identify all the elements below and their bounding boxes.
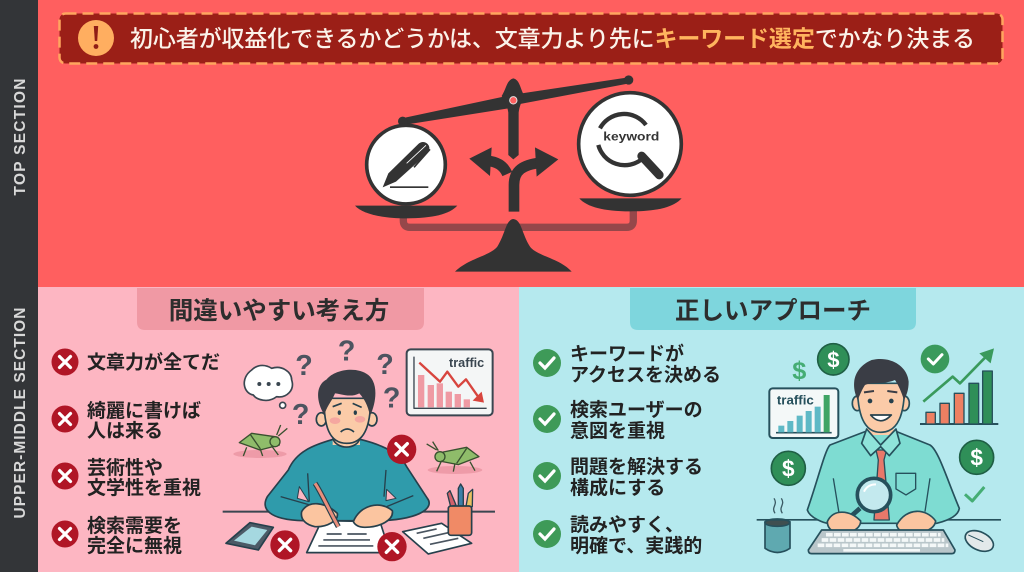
balance scale illustration (355, 75, 682, 272)
keyboard (808, 530, 955, 554)
left pan (355, 206, 457, 218)
traffic down chart: traffic (449, 356, 484, 370)
tie (874, 450, 889, 520)
tablet (226, 523, 273, 550)
panel: top section background (38, 0, 1024, 287)
heading: mistaken thinking (137, 288, 424, 330)
question marks: ? (292, 399, 309, 431)
panel: sidebar (0, 0, 38, 572)
list item: search intent: 意図を重視 (570, 420, 665, 442)
question marks: ? (295, 350, 313, 382)
sidebar label: upper-middle section: UPPER-MIDDLE SECTION (12, 308, 29, 518)
hands (827, 512, 861, 534)
list item: artistry: 芸術性や (87, 456, 163, 479)
list item: writing is everything: 文章力が全てだ (87, 350, 220, 374)
question marks: ? (338, 336, 355, 368)
heading: correct approach (630, 288, 916, 330)
list item: readability (533, 514, 702, 557)
list item: keywords: アクセスを決める (570, 364, 721, 386)
beam (403, 77, 629, 125)
dollar icons: $ (792, 357, 806, 385)
panel: mistaken thinking (38, 287, 519, 572)
list item: problem solving: 構成にする (570, 476, 665, 499)
check icons (921, 345, 984, 501)
x badge on shoulder (387, 435, 416, 464)
list item: search intent (533, 399, 703, 442)
growth chart (920, 348, 998, 424)
pen cup (447, 484, 473, 535)
list item: readability: 読みやすく、 (570, 514, 684, 536)
table line (223, 511, 495, 513)
list item: artistry (52, 456, 201, 499)
dollar icons: $ (827, 347, 839, 372)
thought bubble (244, 365, 292, 408)
list item: ignoring demand: 検索需要を (87, 515, 182, 537)
traffic up chart: traffic (777, 392, 814, 407)
mouse (962, 526, 997, 555)
paper (307, 521, 390, 553)
list item: keywords (533, 342, 721, 386)
fork arrows (469, 147, 558, 212)
panel: correct approach (519, 287, 1024, 572)
list item: keywords: キーワードが (570, 342, 684, 365)
body (807, 432, 959, 523)
side note (403, 523, 472, 554)
question marks: ? (376, 349, 394, 381)
head (852, 359, 909, 456)
list item: problem solving: 問題を解決する (570, 456, 703, 478)
crossbar behind base (403, 211, 633, 227)
title banner (60, 14, 1002, 64)
coffee mug (765, 498, 790, 552)
list item: pretty writing (52, 399, 201, 442)
table line (757, 519, 1001, 521)
icon: keyword magnifier in circle (579, 93, 681, 195)
traffic down chart (407, 349, 493, 415)
body (265, 439, 429, 521)
hands and pencil (301, 483, 392, 527)
list item: writing is everything (52, 348, 220, 376)
pocket (896, 473, 916, 495)
title text: 初心者が収益化できるかどうかは、文章力より先にキーワード選定でかなり決まる (130, 26, 975, 52)
question marks (292, 336, 400, 431)
list item: ignoring demand (52, 515, 182, 557)
heading: mistaken thinking: 間違いやすい考え方 (169, 297, 389, 325)
dollar icons (771, 344, 994, 485)
icon: keyword magnifier in circle: keyword (603, 130, 659, 144)
list item: pretty writing: 人は来る (87, 420, 163, 442)
list item: readability: 明確で、実践的 (570, 535, 702, 557)
heading: correct approach: 正しいアプローチ (675, 297, 871, 325)
icon: pen in circle (367, 125, 445, 204)
list item: problem solving (533, 456, 703, 499)
dollar icons: $ (970, 445, 983, 471)
grasshopper left (233, 425, 287, 458)
grasshopper right (427, 442, 482, 474)
base (455, 219, 572, 272)
right pan (579, 198, 682, 211)
list item: search intent: 検索ユーザーの (570, 399, 703, 421)
list item: artistry: 文学性を重視 (87, 476, 201, 499)
x badge near tablet (270, 530, 300, 560)
sidebar label: top section: TOP SECTION (12, 78, 29, 196)
list item: ignoring demand: 完全に無視 (87, 535, 182, 557)
list item: pretty writing: 綺麗に書けば (87, 399, 201, 422)
pivot and post (502, 78, 524, 159)
icon: warning (78, 20, 114, 56)
dollar icons: $ (782, 456, 795, 482)
traffic up chart (769, 388, 838, 438)
head (316, 370, 377, 447)
illustration: confident marketer (757, 344, 1001, 555)
question marks: ? (383, 382, 400, 414)
magnifier (847, 478, 891, 520)
illustration: confused writer (223, 336, 495, 561)
x badge near paper (377, 532, 407, 561)
